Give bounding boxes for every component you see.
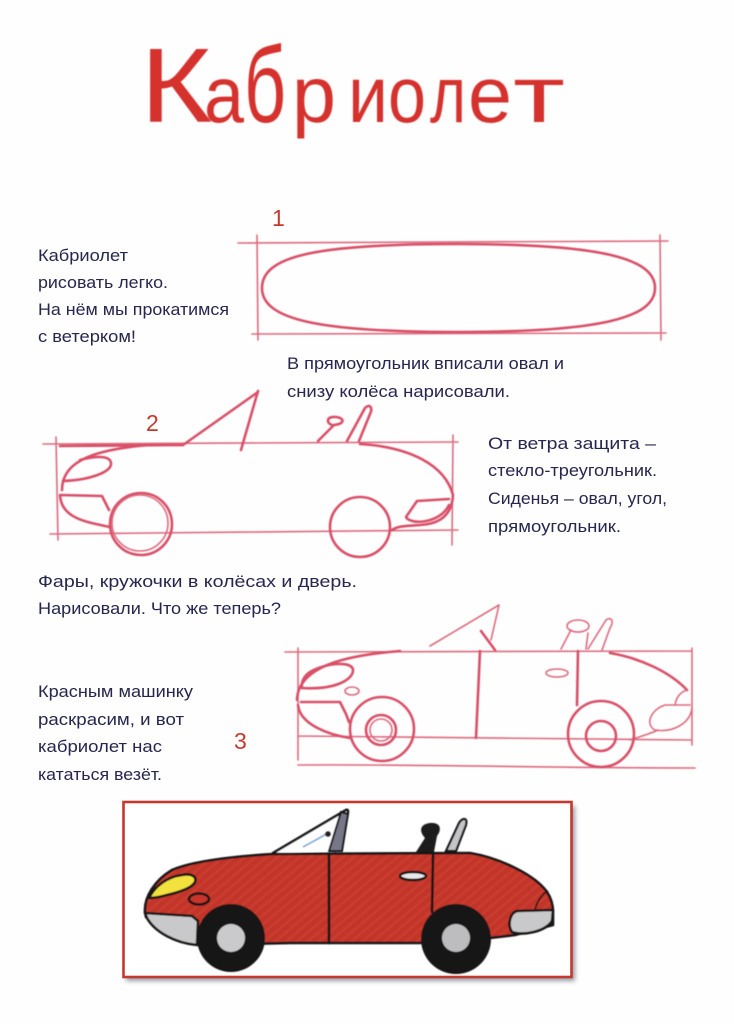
title: К xyxy=(140,27,212,145)
text block: step 3 caption: Красным машинку xyxy=(38,682,194,701)
text block: step 2 caption right: стекло-треугольник. xyxy=(488,461,657,480)
text block: step 2 caption right: Сиденья – овал, угол, xyxy=(488,489,667,508)
car illustration xyxy=(145,810,553,974)
step 1 drawing: rectangle and oval xyxy=(238,235,668,340)
title: е xyxy=(468,50,512,139)
title: а xyxy=(204,50,244,139)
text block: step 3 caption: кататься везёт. xyxy=(38,765,162,784)
step 2 drawing: car outline xyxy=(43,391,458,557)
text block: intro: рисовать легко. xyxy=(38,273,168,292)
title: л xyxy=(430,50,466,139)
text block: step 2 caption below xyxy=(38,572,357,618)
text block: step 2 caption right xyxy=(488,434,667,536)
step number 3: 3 xyxy=(234,728,247,754)
text block: step 2 caption below: Нарисовали. Что же теперь? xyxy=(38,599,281,618)
title xyxy=(140,24,565,145)
text block: step 2 caption right: прямоугольник. xyxy=(488,517,621,536)
title: о xyxy=(388,50,426,139)
text block: step 2 caption right: От ветра защита – xyxy=(488,434,657,453)
step number 2: 2 xyxy=(146,410,159,436)
text block: step 1 caption: снизу колёса нарисовали. xyxy=(287,382,510,401)
text block: step 1 caption: В прямоугольник вписали овал и xyxy=(287,354,564,373)
text block: intro: с ветерком! xyxy=(38,327,136,346)
text block: step 1 caption xyxy=(287,354,564,401)
text block: intro: На нём мы прокатимся xyxy=(38,300,229,319)
text block: step 3 caption xyxy=(38,682,194,784)
step 3 drawing: detailed car outline xyxy=(285,605,695,768)
title: т xyxy=(513,50,565,139)
step number 1: 1 xyxy=(272,205,285,231)
text block: intro xyxy=(38,246,229,346)
panel: finished red car xyxy=(124,802,575,981)
text block: step 3 caption: раскрасим, и вот xyxy=(38,710,184,729)
title: и xyxy=(348,50,388,139)
text block: step 3 caption: кабриолет нас xyxy=(38,737,163,756)
text block: intro: Кабриолет xyxy=(38,246,128,265)
title: б xyxy=(244,24,286,145)
text block: step 2 caption below: Фары, кружочки в колёсах и дверь. xyxy=(38,572,357,591)
title: р xyxy=(292,50,336,139)
